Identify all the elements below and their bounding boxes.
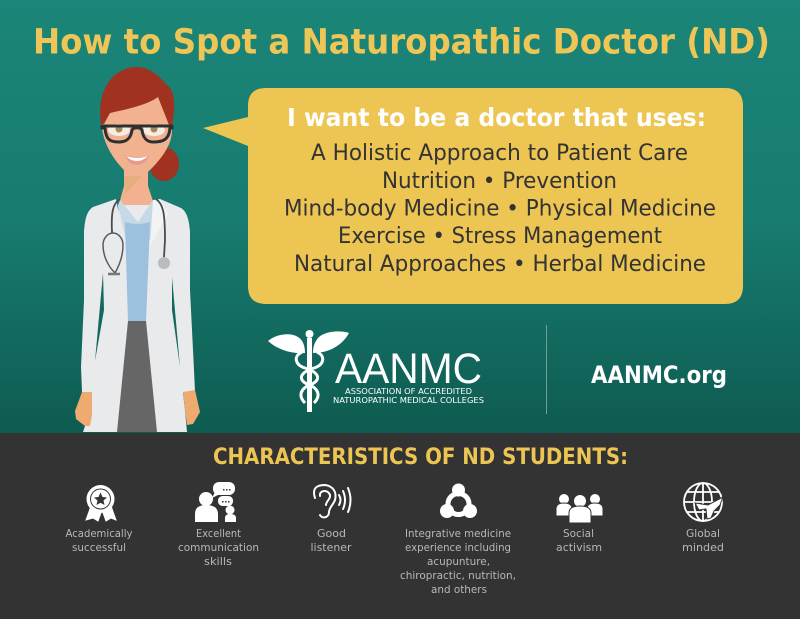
item: communication skills: Excellent (196, 527, 242, 540)
hands (75, 392, 92, 426)
hair bun (149, 147, 179, 181)
item: global minded: minded (682, 541, 724, 554)
coat gaps (95, 273, 104, 361)
item: communication skills (178, 482, 259, 568)
logo subtitle: ASSOCIATION OF ACCREDITED (345, 387, 472, 396)
item: good listener: listener (310, 541, 352, 554)
item: academically successful: successful (72, 541, 126, 554)
speech bubble (203, 88, 743, 304)
panel: characteristics (66, 445, 724, 596)
icon: globe with airplane (684, 483, 723, 521)
icon: award rosette (86, 485, 116, 521)
illustration: doctor (75, 67, 200, 432)
bubble list (284, 141, 716, 277)
bubble list: Nutrition • Prevention (382, 169, 617, 194)
item: communication skills: communication (178, 541, 259, 554)
website link: AANMC.org (591, 361, 727, 389)
bubble heading: I want to be a doctor that uses: (287, 103, 706, 132)
item: academically successful: Academically (66, 527, 133, 540)
mouth (125, 155, 149, 165)
item: global minded (682, 483, 724, 554)
bubble list: Exercise • Stress Management (338, 224, 662, 249)
hair (100, 67, 174, 125)
item: integrative medicine (400, 484, 516, 596)
icon: group of people (556, 494, 603, 523)
bubble list: A Holistic Approach to Patient Care (311, 141, 688, 166)
characteristics heading: CHARACTERISTICS OF ND STUDENTS: (213, 445, 628, 470)
item: integrative medicine: experience including (405, 541, 511, 554)
white coat (81, 199, 195, 432)
item: good listener: Good (317, 527, 346, 540)
item: social activism (556, 494, 603, 554)
neck (119, 165, 154, 224)
item: integrative medicine: Integrative medicine (405, 527, 511, 540)
logo wordmark: AANMC (335, 345, 482, 393)
item: global minded: Global (686, 527, 720, 540)
item: integrative medicine: chiropractic, nutrition, (400, 569, 516, 582)
shirt collar (118, 200, 158, 240)
item: integrative medicine: and others (431, 583, 487, 596)
icon: connected circles (440, 484, 477, 518)
bubble list: Natural Approaches • Herbal Medicine (294, 252, 706, 277)
AANMC logo: NATUROPATHIC MEDICAL COLLEGES (333, 396, 484, 405)
item: social activism: activism (556, 541, 602, 554)
item: communication skills: skills (204, 555, 232, 568)
item: social activism: Social (563, 527, 594, 540)
icon: people talking (195, 482, 236, 522)
grey skirt (117, 321, 157, 432)
face (102, 90, 172, 175)
glasses (102, 124, 172, 142)
item: good listener (310, 485, 352, 554)
icon: ear with sound waves (314, 485, 350, 517)
AANMC logo (268, 330, 484, 412)
stethoscope (103, 199, 165, 274)
item: academically successful (66, 485, 133, 554)
bubble list: Mind-body Medicine • Physical Medicine (284, 196, 716, 222)
coat inner fill (118, 205, 158, 321)
blue shirt (125, 222, 150, 322)
caduceus icon (268, 330, 349, 412)
collar highlight (150, 199, 168, 246)
item: integrative medicine: acupunture, (427, 555, 490, 568)
